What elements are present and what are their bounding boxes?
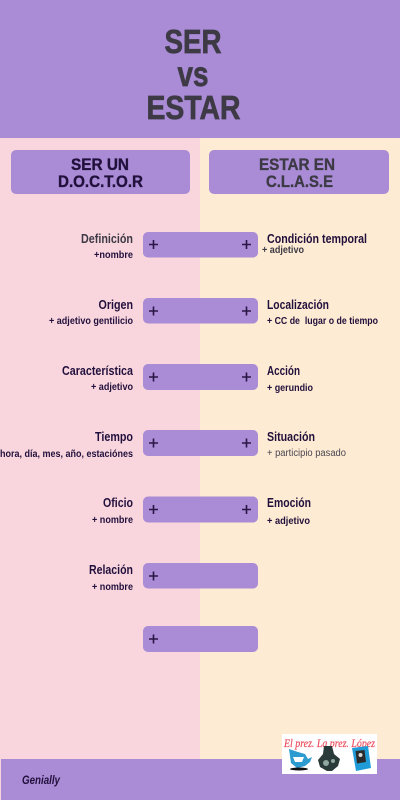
row 1 bar with plus icons bbox=[143, 232, 258, 258]
heading: estar en clase: C.L.A.S.E bbox=[266, 172, 333, 191]
ser use: oficio: + nombre bbox=[92, 515, 133, 526]
row 6 bar with plus icon bbox=[143, 563, 258, 588]
estar use: emocion: Emoción bbox=[267, 495, 311, 510]
estar use: accion: Acción bbox=[267, 363, 300, 378]
estar use: condicion temporal bbox=[262, 231, 367, 256]
estar use: accion bbox=[267, 363, 313, 394]
ser use: caracteristica: + adjetivo bbox=[91, 382, 133, 393]
estar use: emocion bbox=[267, 495, 311, 527]
estar use: localizacion bbox=[267, 297, 378, 327]
ser use: caracteristica: Característica bbox=[62, 363, 134, 378]
icon: dark figure bbox=[318, 746, 340, 771]
ser use: caracteristica bbox=[62, 363, 134, 393]
heading: estar en clase: ESTAR EN bbox=[259, 155, 335, 174]
panel: footer band bbox=[1, 759, 400, 800]
ser use: origen: Origen bbox=[98, 297, 133, 312]
estar use: condicion temporal: + adjetivo bbox=[262, 245, 304, 256]
ser use: relacion bbox=[89, 562, 133, 593]
logo bbox=[282, 734, 377, 774]
heading: ser un doctor: SER UN bbox=[71, 155, 129, 174]
estar use: condicion temporal: Condición temporal bbox=[267, 231, 367, 246]
panel: left pink background bbox=[0, 138, 200, 760]
ser use: origen: + adjetivo gentilicio bbox=[49, 316, 133, 327]
heading: ser un doctor: D.O.C.T.O.R bbox=[58, 172, 143, 191]
ser use: tiempo: Tiempo bbox=[95, 429, 133, 444]
estar use: accion: + gerundio bbox=[267, 383, 313, 394]
row 3 bar with plus icons bbox=[143, 364, 258, 390]
heading: ser un doctor bbox=[11, 150, 190, 194]
panel: header band bbox=[0, 0, 400, 138]
ser use: definicion: +nombre bbox=[94, 250, 133, 261]
ser use: origen bbox=[49, 297, 133, 327]
estar use: situacion bbox=[267, 429, 346, 459]
ser use: definicion: Definición bbox=[81, 231, 133, 246]
footer credit: Genially bbox=[22, 775, 61, 787]
panel: right cream background bbox=[200, 138, 400, 760]
ser use: relacion: + nombre bbox=[92, 582, 133, 593]
row 5 bar with plus icons bbox=[143, 496, 258, 522]
row 7 bar with plus icon bbox=[143, 626, 258, 652]
icon: blue framed portrait bbox=[352, 746, 371, 771]
title bbox=[146, 23, 241, 126]
estar use: localizacion: Localización bbox=[267, 297, 329, 312]
row 2 bar with plus icons bbox=[143, 298, 258, 324]
ser use: relacion: Relación bbox=[89, 562, 133, 577]
row 4 bar with plus icons bbox=[143, 430, 258, 456]
title: ESTAR bbox=[146, 89, 241, 126]
icon: shark bbox=[289, 749, 312, 770]
title: SER bbox=[164, 23, 222, 60]
ser use: tiempo bbox=[0, 429, 133, 460]
logo: El prez. La prez. López bbox=[283, 736, 375, 750]
heading: estar en clase bbox=[209, 150, 389, 194]
estar use: localizacion: + CC de lugar o de tiempo bbox=[267, 316, 378, 327]
ser use: definicion bbox=[81, 231, 133, 261]
ser use: oficio bbox=[92, 495, 133, 526]
ser use: tiempo: hora, día, mes, año, estaciónes bbox=[0, 449, 133, 460]
estar use: emocion: + adjetivo bbox=[267, 516, 310, 527]
estar use: situacion: + participio pasado bbox=[267, 448, 346, 459]
title: vs bbox=[178, 55, 208, 94]
estar use: situacion: Situación bbox=[267, 429, 315, 444]
ser use: oficio: Oficio bbox=[103, 495, 133, 510]
